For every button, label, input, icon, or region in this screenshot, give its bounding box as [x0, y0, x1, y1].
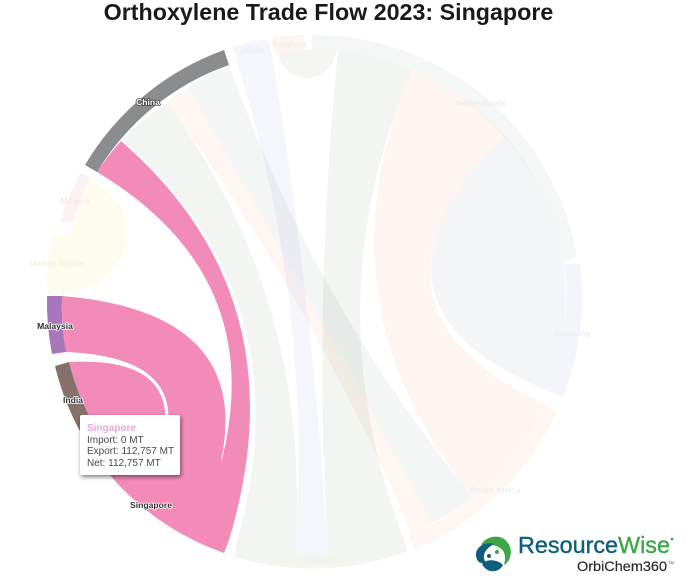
label: Malaysia: Malaysia	[37, 321, 73, 331]
ribbon: Belgium to Netherlands	[277, 50, 337, 78]
country labels	[30, 39, 591, 566]
faded chord ribbons and country arcs	[46, 35, 582, 569]
label: South Africa: South Africa	[470, 485, 521, 495]
ribbon: Japan to Taiwan	[233, 39, 328, 554]
icon: ResourceWise swirl	[476, 537, 511, 571]
label: Mexico: Mexico	[60, 196, 90, 206]
wordmark: ResourceWise: ResourceWise	[518, 532, 670, 558]
label: Taiwan: Taiwan	[305, 556, 333, 566]
ribbon: Netherlands to South Africa	[374, 70, 543, 497]
label: Germany: Germany	[553, 328, 591, 338]
arc: Mexico	[60, 173, 90, 223]
ribbon: Netherlands to Germany	[431, 136, 566, 391]
tooltip import: Import: 0 MT	[87, 434, 144, 446]
label: Belgium: Belgium	[272, 39, 306, 49]
label: Singapore: Singapore	[130, 500, 172, 510]
pink chords into Singapore	[62, 141, 250, 553]
label: Netherlands: Netherlands	[456, 98, 506, 108]
ribbon: China to Taiwan	[122, 103, 297, 553]
label: Japan: Japan	[240, 45, 264, 55]
ribbon: Mexico to United States	[62, 177, 127, 292]
arc: Taiwan	[235, 537, 408, 569]
label: China: China	[136, 97, 160, 107]
arc: Belgium	[273, 35, 304, 52]
ribbon: China to South Africa, grey	[188, 65, 473, 523]
wordmark: OrbiChem360: OrbiChem360	[577, 558, 667, 574]
logo: ResourceWise OrbiChem360	[476, 532, 674, 574]
arc: Malaysia	[47, 296, 66, 354]
arc: United States	[46, 236, 70, 292]
ribbon: China to South Africa, orange	[167, 87, 432, 534]
registered mark	[671, 538, 673, 540]
ribbon: China to Singapore	[97, 141, 250, 540]
arc: China	[85, 50, 229, 172]
label: India: India	[63, 395, 83, 405]
tooltip net: Net: 112,757 MT	[87, 458, 161, 468]
tooltip export: Export: 112,757 MT	[87, 446, 174, 457]
ribbon: India to Singapore	[69, 362, 165, 482]
ribbon: Malaysia to Singapore	[62, 296, 225, 525]
arc: South Africa	[410, 404, 557, 549]
tooltip: Singapore values	[80, 415, 180, 475]
arc: Netherlands	[312, 35, 577, 262]
arc: India	[55, 362, 98, 440]
arc: Germany	[548, 264, 582, 397]
trademark: TM	[668, 560, 674, 565]
arc: Singapore	[90, 440, 229, 553]
tooltip heading: Singapore	[87, 423, 136, 434]
ribbon: Netherlands to Taiwan	[322, 51, 412, 553]
label: United States: United States	[30, 258, 85, 268]
